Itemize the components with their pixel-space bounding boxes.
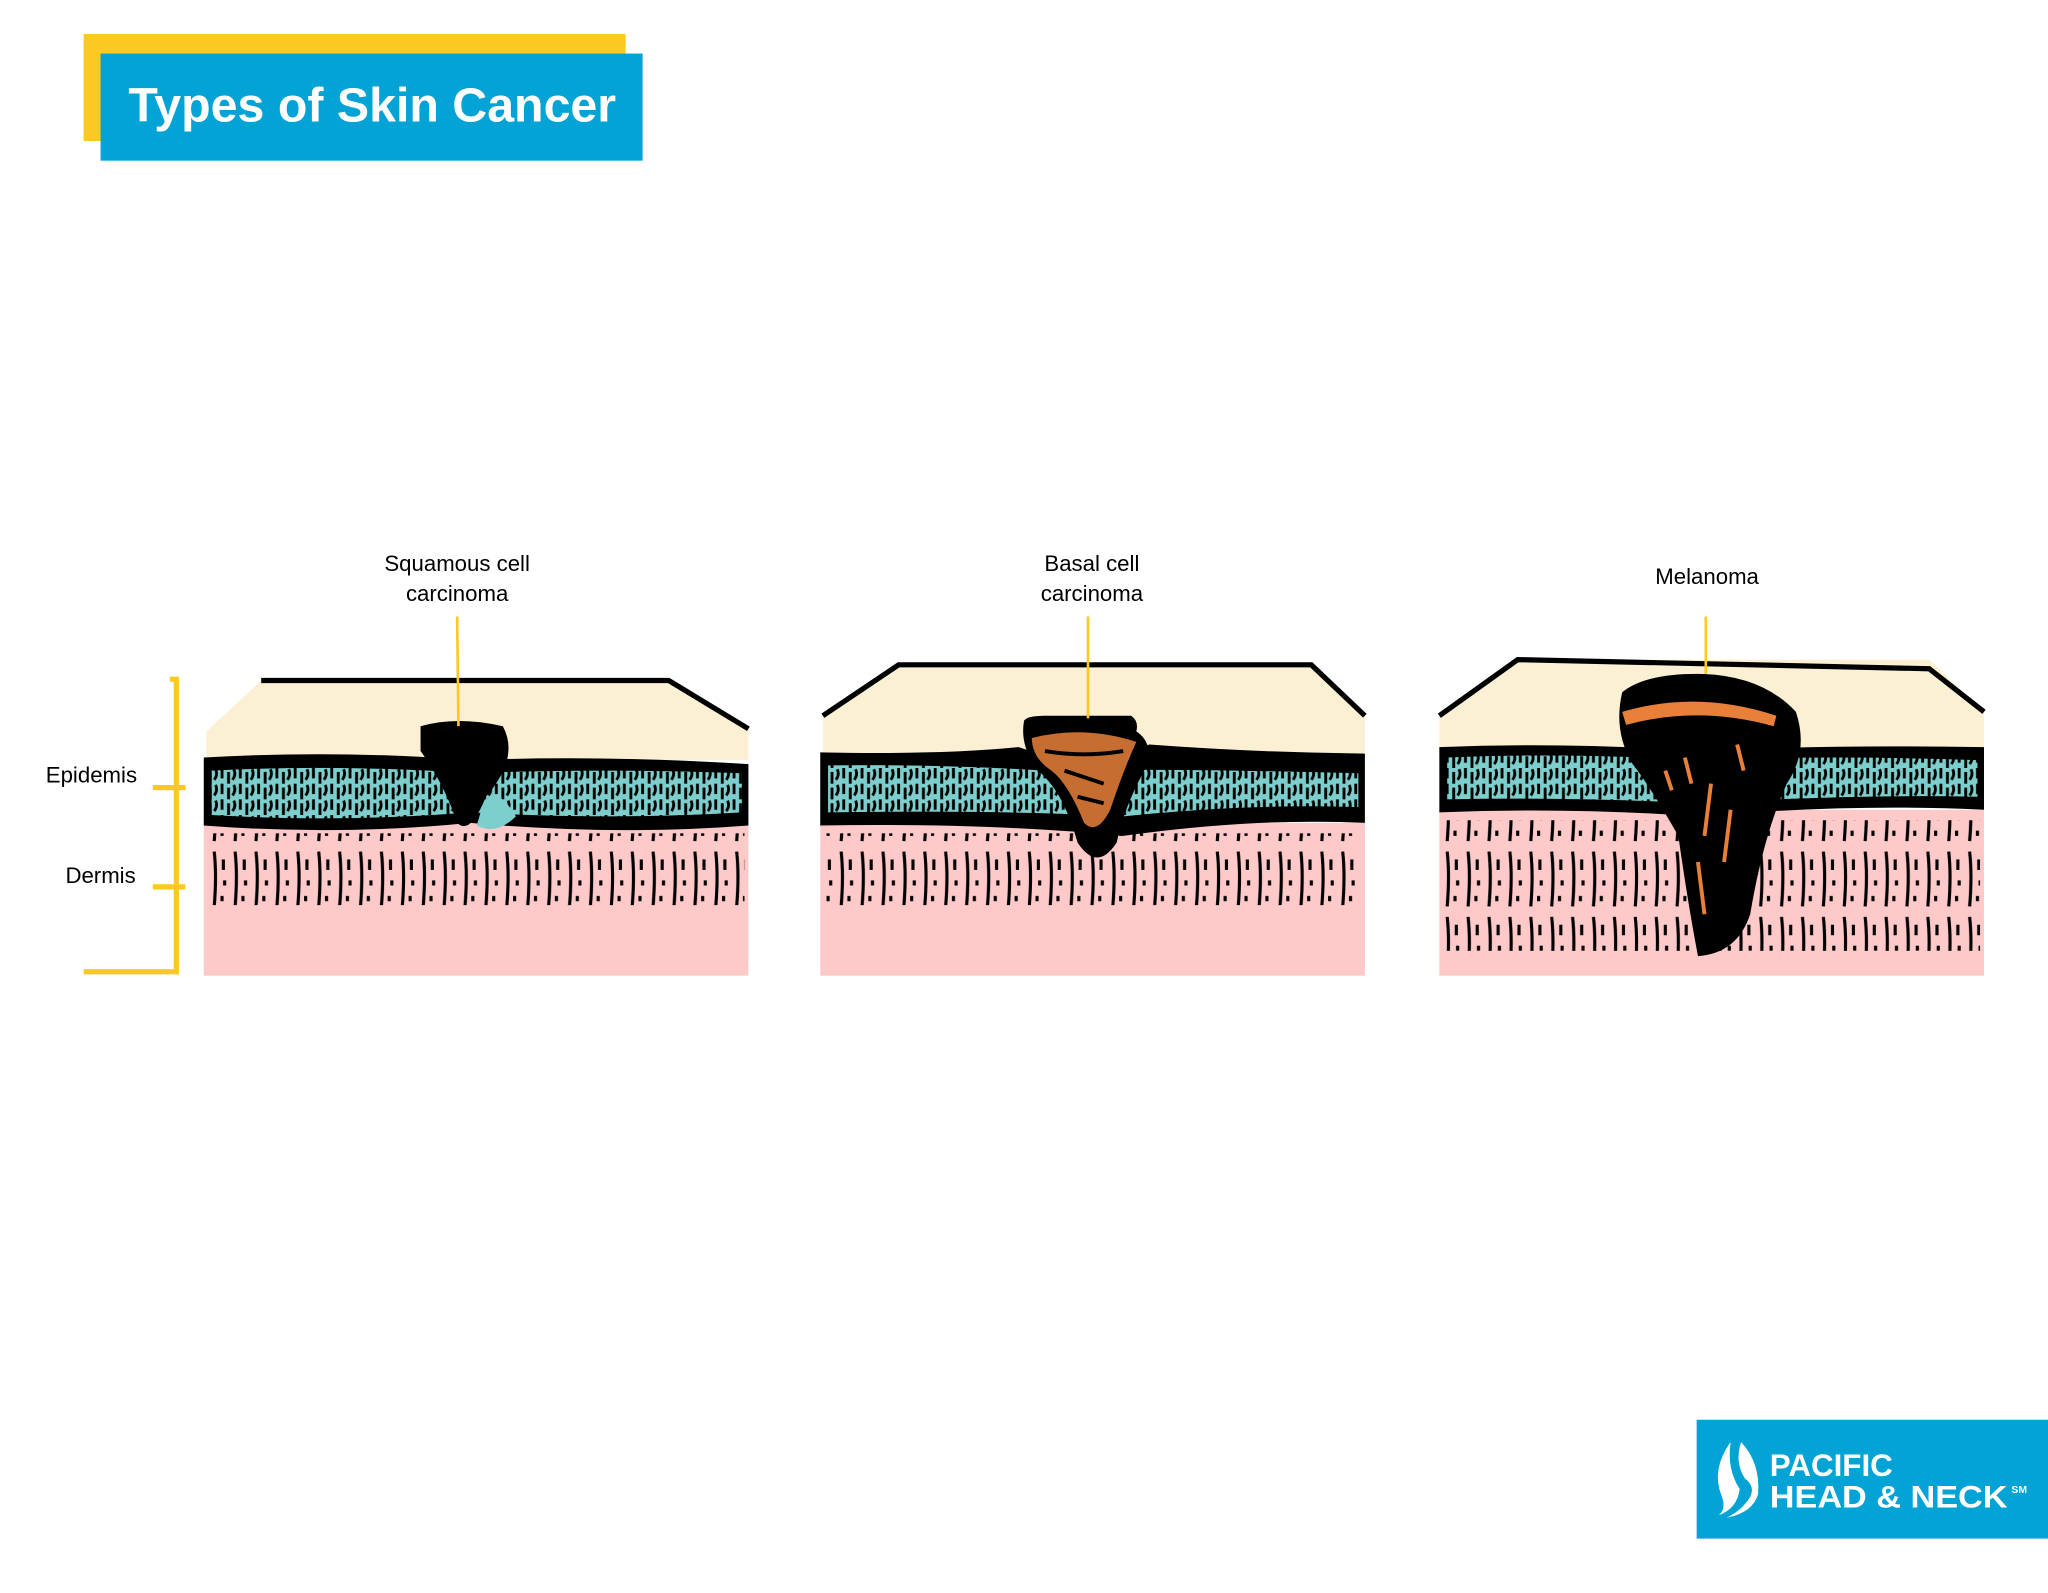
- panel: basal cell carcinoma: carcinoma: [1041, 581, 1144, 606]
- panel: basal cell carcinoma: [820, 551, 1365, 976]
- layer bracket: [46, 679, 185, 972]
- panel: squamous cell carcinoma: [204, 551, 748, 976]
- title: [84, 34, 643, 161]
- logo: [1697, 1420, 2048, 1539]
- layer bracket: Epidemis: [46, 762, 137, 787]
- title: Types of Skin Cancer: [128, 78, 616, 132]
- logo: SM: [2011, 1485, 2027, 1496]
- panel: melanoma: Melanoma: [1655, 564, 1760, 589]
- layer bracket: Dermis: [65, 863, 136, 888]
- logo: HEAD & NECK: [1770, 1479, 2008, 1514]
- panel: squamous cell carcinoma: carcinoma: [406, 581, 509, 606]
- panel: squamous cell carcinoma: Squamous cell: [384, 551, 530, 576]
- panel: basal cell carcinoma: Basal cell: [1044, 551, 1139, 576]
- panel: melanoma: [1439, 564, 1984, 976]
- logo: PACIFIC: [1770, 1448, 1893, 1483]
